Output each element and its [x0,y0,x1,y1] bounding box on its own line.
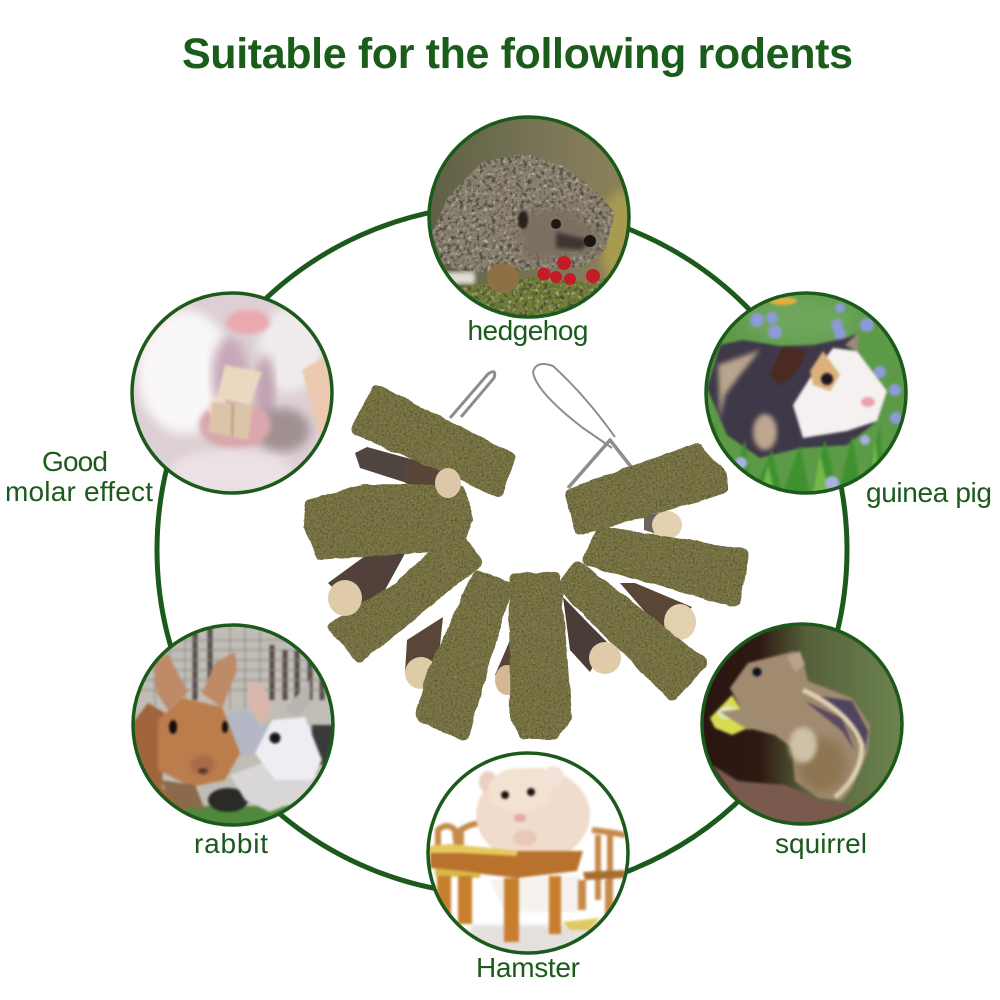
stick cut ends in front of discs [328,468,461,616]
rabbit circle border [133,625,333,825]
label: Good molar effect: Good [42,446,108,477]
hamster circle border [428,753,628,953]
photo: rabbit [134,626,332,824]
label: rabbit: rabbit [194,828,268,859]
label: Good molar effect: molar effect [5,476,153,507]
wire loops and clasp [450,364,632,488]
toy product: hay discs and wood sticks [310,364,743,734]
guinea pig circle border [706,293,906,493]
label: hedgehog: hedgehog [468,315,588,346]
photo: hedgehog [430,118,628,316]
wood sticks [328,447,696,695]
title: Suitable for the following rodents [182,30,853,78]
teeth circle border [132,293,332,493]
label: squirrel: squirrel [775,828,867,859]
label: guinea pig: guinea pig [866,477,992,508]
photo: rabbit teeth close-up [134,294,330,492]
squirrel circle border [702,624,902,824]
hay discs [310,391,743,734]
photo: hamster [430,765,625,952]
hedgehog circle border [429,117,629,317]
photo: squirrel [704,626,900,822]
label: Hamster: Hamster [476,952,580,983]
label: Good molar effect [5,446,153,507]
connecting ring [157,205,847,895]
photo: guinea pig [708,294,904,492]
